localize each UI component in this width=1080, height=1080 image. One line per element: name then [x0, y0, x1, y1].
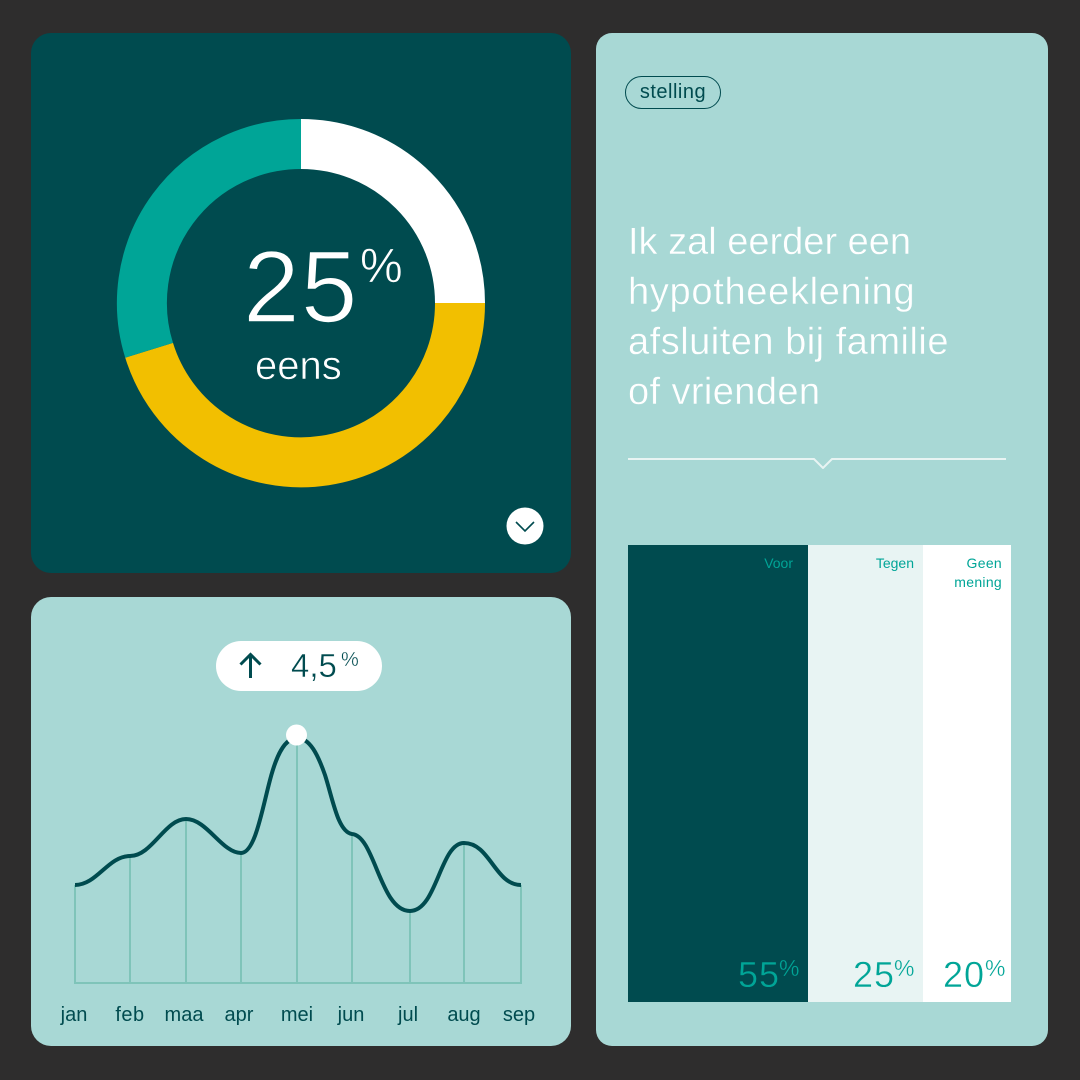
statement text [628, 221, 949, 413]
line chart [74, 724, 522, 984]
statement text: hypotheeklening [628, 271, 915, 313]
tag: stelling: stelling [640, 81, 706, 103]
divider with notch [628, 458, 1006, 469]
voor percent sign: % [779, 955, 799, 981]
geen mening label [954, 555, 1002, 590]
tegen percent sign: % [894, 955, 914, 981]
month labels: mei [281, 1004, 313, 1026]
bar: voor [628, 545, 808, 1002]
statement text: afsluiten bij familie [628, 321, 949, 363]
tag: stelling [625, 76, 721, 109]
month labels: sep [503, 1004, 535, 1026]
month labels: jun [338, 1004, 364, 1026]
month labels [60, 1004, 535, 1026]
statement text: Ik zal eerder een [628, 221, 911, 263]
icon: up arrow [240, 652, 262, 678]
change badge [216, 641, 382, 691]
month labels: jan [61, 1004, 87, 1026]
change value: 4,5 [291, 647, 337, 684]
month labels: feb [115, 1004, 145, 1026]
tegen label: Tegen [876, 555, 914, 571]
change percent sign: % [341, 649, 359, 671]
geen mening value: 20 [943, 954, 985, 995]
month labels: aug [447, 1004, 481, 1026]
tegen value: 25 [853, 954, 895, 995]
bar: tegen [808, 545, 923, 1002]
month labels: apr [225, 1004, 253, 1026]
donut label: eens [255, 344, 342, 388]
month labels: maa [165, 1004, 203, 1026]
geen mening percent sign: % [985, 955, 1005, 981]
panel: donut chart [31, 33, 571, 573]
donut percent sign: % [360, 240, 403, 293]
voor value: 55 [738, 954, 780, 995]
month labels: jul [398, 1004, 418, 1026]
donut chart [116, 119, 485, 488]
geen mening label: mening [954, 574, 1002, 590]
donut value: 25 [243, 230, 358, 344]
voor label: Voor [764, 555, 793, 571]
panel: statement [596, 33, 1048, 1046]
icon: chevron button [506, 508, 544, 544]
stacked bar chart [628, 545, 1011, 1002]
geen mening label: Geen [967, 555, 1002, 571]
bar: geen mening [923, 545, 1011, 1002]
panel: line chart [31, 597, 571, 1046]
statement text: of vrienden [628, 371, 820, 413]
